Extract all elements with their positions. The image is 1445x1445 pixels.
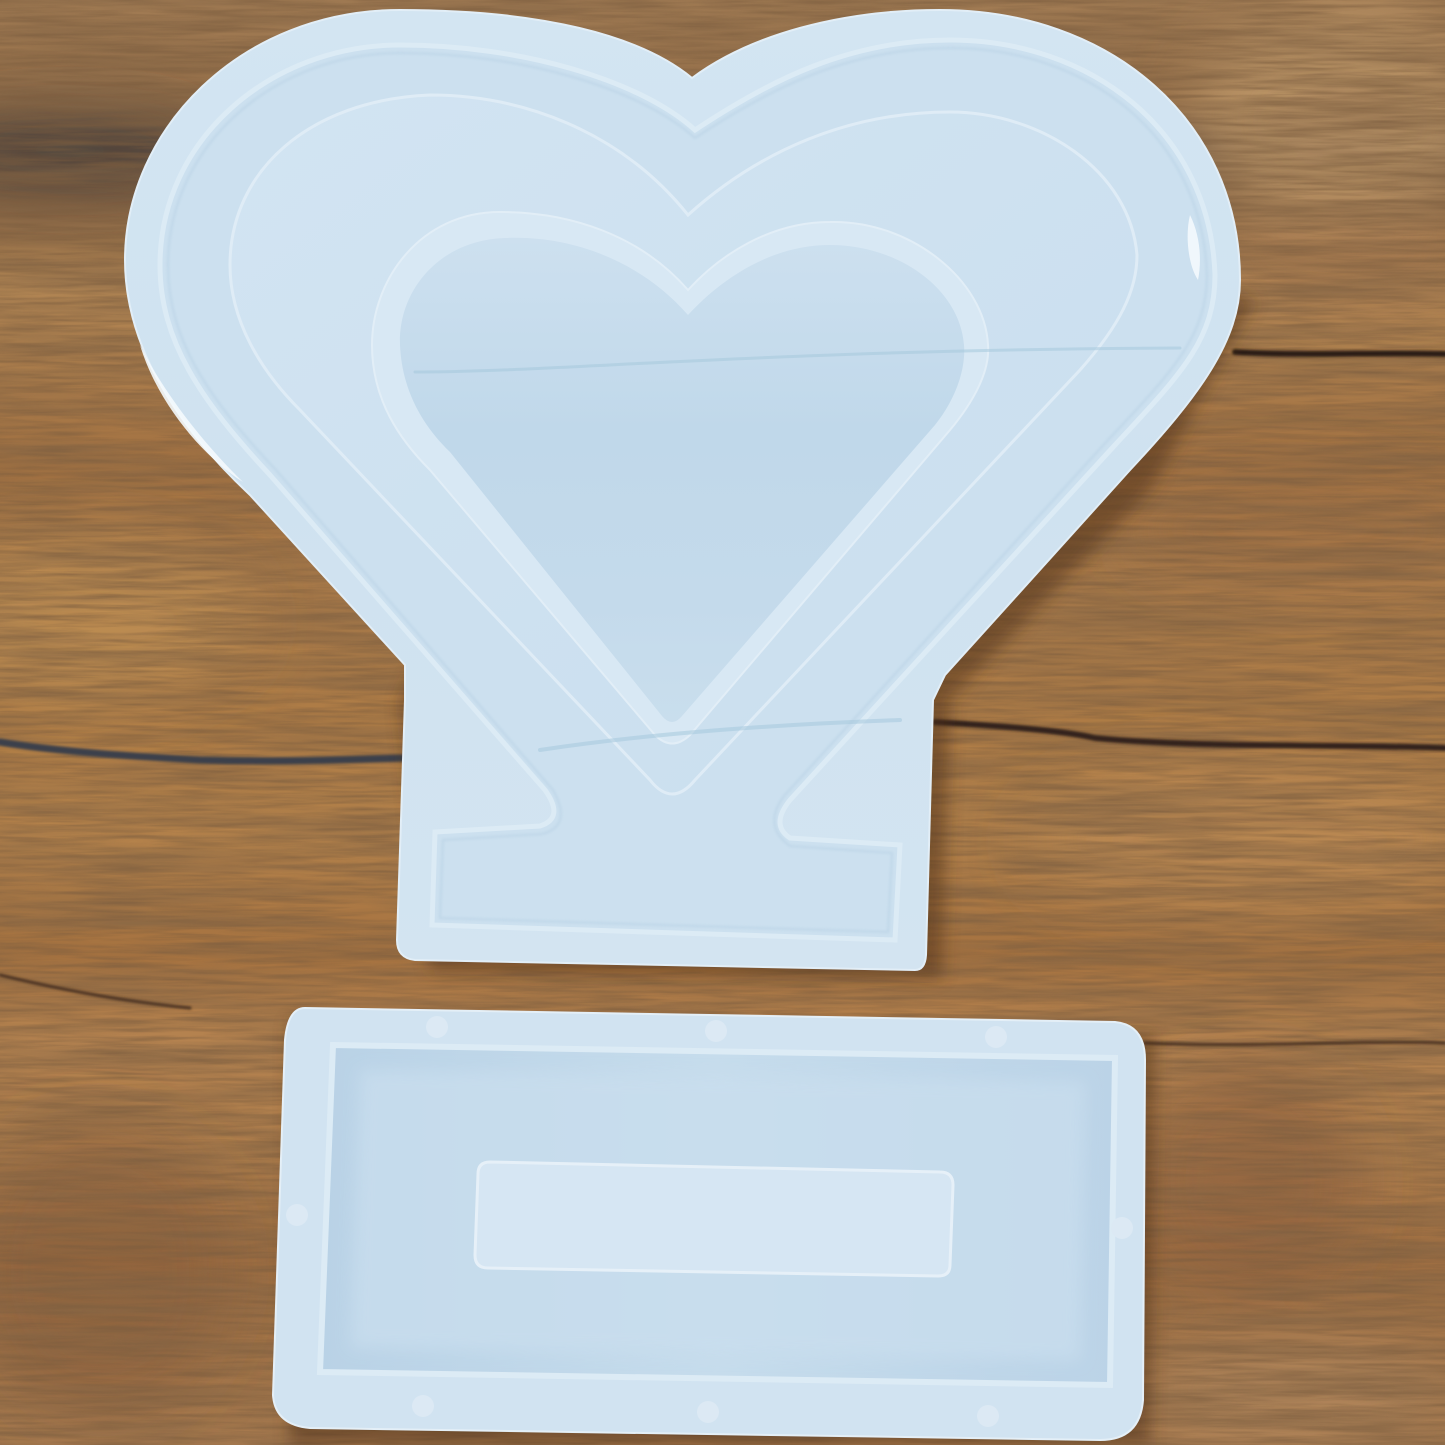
heart stand mould: [125, 10, 1240, 970]
inner heart rim: [372, 212, 988, 744]
mould shadows on the table: [290, 90, 1255, 1445]
glossy highlights: [140, 215, 1200, 482]
base outer edge: [273, 1008, 1145, 1440]
outer silhouette of heart and stand: [125, 10, 1240, 970]
rim inner shading: [168, 48, 1207, 932]
raised middle heart: [230, 95, 1137, 794]
wood cracks: [0, 352, 1445, 1045]
rectangular base mould: [273, 1008, 1145, 1440]
blue streak marks: [415, 348, 1180, 750]
raised bar in the base: [475, 1162, 953, 1276]
tray floor highlight: [350, 1070, 1085, 1360]
locating tabs around base: [286, 1016, 1133, 1427]
outer tray rim: [160, 40, 1215, 940]
base tray cavity: [320, 1045, 1115, 1385]
inner heart cavity: [400, 238, 964, 722]
